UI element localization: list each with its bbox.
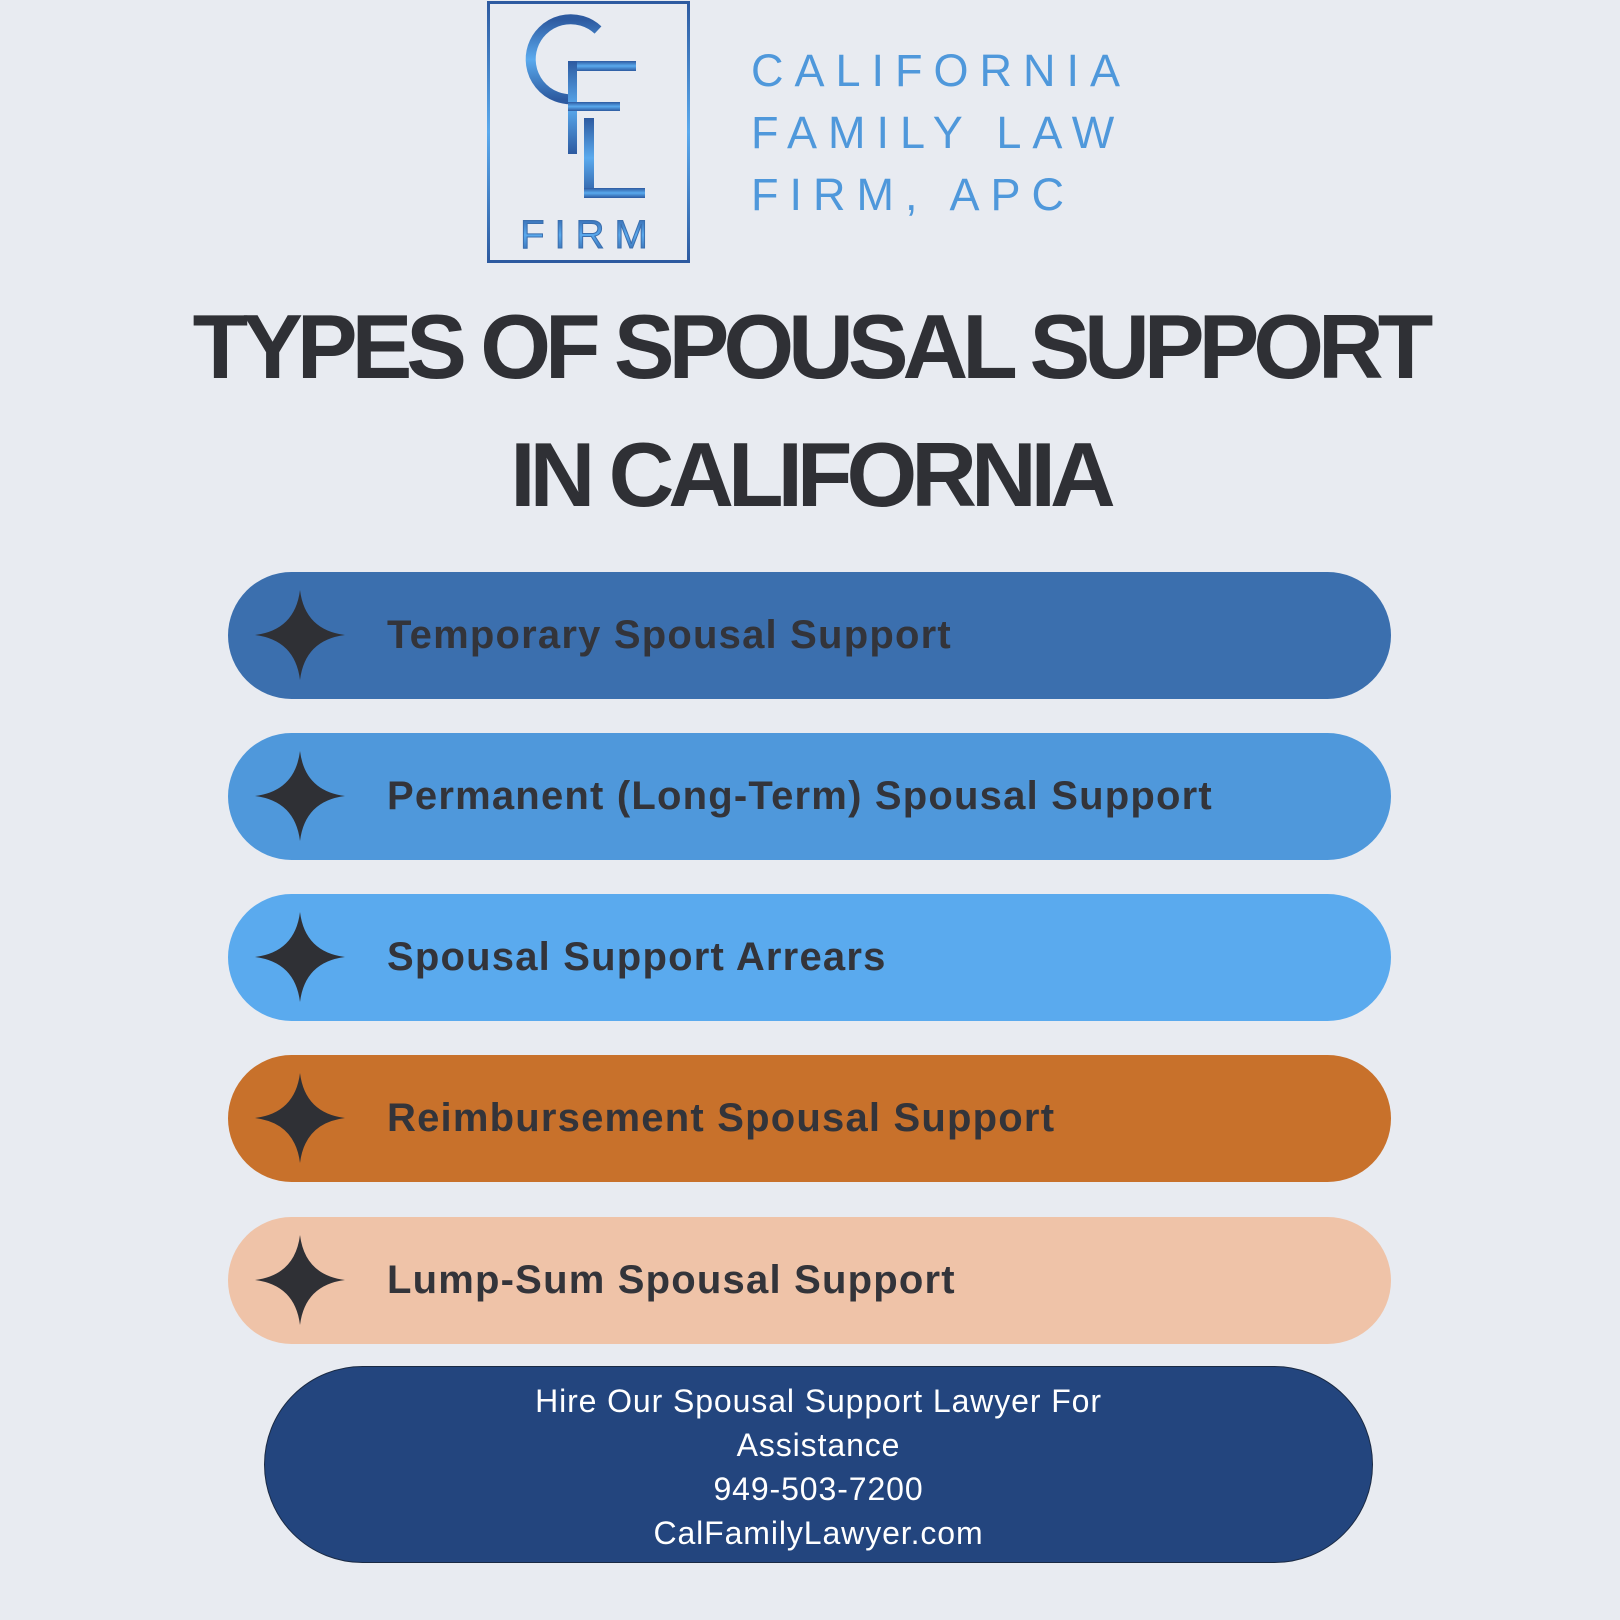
logo: FIRM <box>520 213 658 257</box>
firm name: FIRM, APC <box>751 169 1075 220</box>
pill: temporary: Temporary Spousal Support <box>387 613 952 657</box>
pill: lump-sum <box>228 1217 1391 1344</box>
pill: reimbursement: Reimbursement Spousal Support <box>387 1096 1055 1140</box>
firm name: FAMILY LAW <box>751 107 1125 158</box>
call to action: 949-503-7200 <box>713 1471 924 1507</box>
call to action: Assistance <box>737 1427 900 1463</box>
title <box>193 297 1432 526</box>
title: IN CALIFORNIA <box>510 425 1110 526</box>
firm name <box>751 45 1131 220</box>
pill: permanent: Permanent (Long-Term) Spousal Support <box>387 774 1213 818</box>
pill: lump-sum: Lump-Sum Spousal Support <box>387 1258 956 1302</box>
call to action: Hire Our Spousal Support Lawyer For <box>535 1383 1102 1419</box>
call to action: CalFamilyLawyer.com <box>653 1515 984 1551</box>
call to action <box>264 1366 1373 1563</box>
pill: arrears: Spousal Support Arrears <box>387 935 887 979</box>
logo <box>487 1 690 263</box>
pill: temporary <box>228 572 1391 699</box>
pill: permanent <box>228 733 1391 860</box>
pill: reimbursement <box>228 1055 1391 1182</box>
firm name: CALIFORNIA <box>751 45 1131 96</box>
pill: arrears <box>228 894 1391 1021</box>
title: TYPES OF SPOUSAL SUPPORT <box>193 297 1427 398</box>
